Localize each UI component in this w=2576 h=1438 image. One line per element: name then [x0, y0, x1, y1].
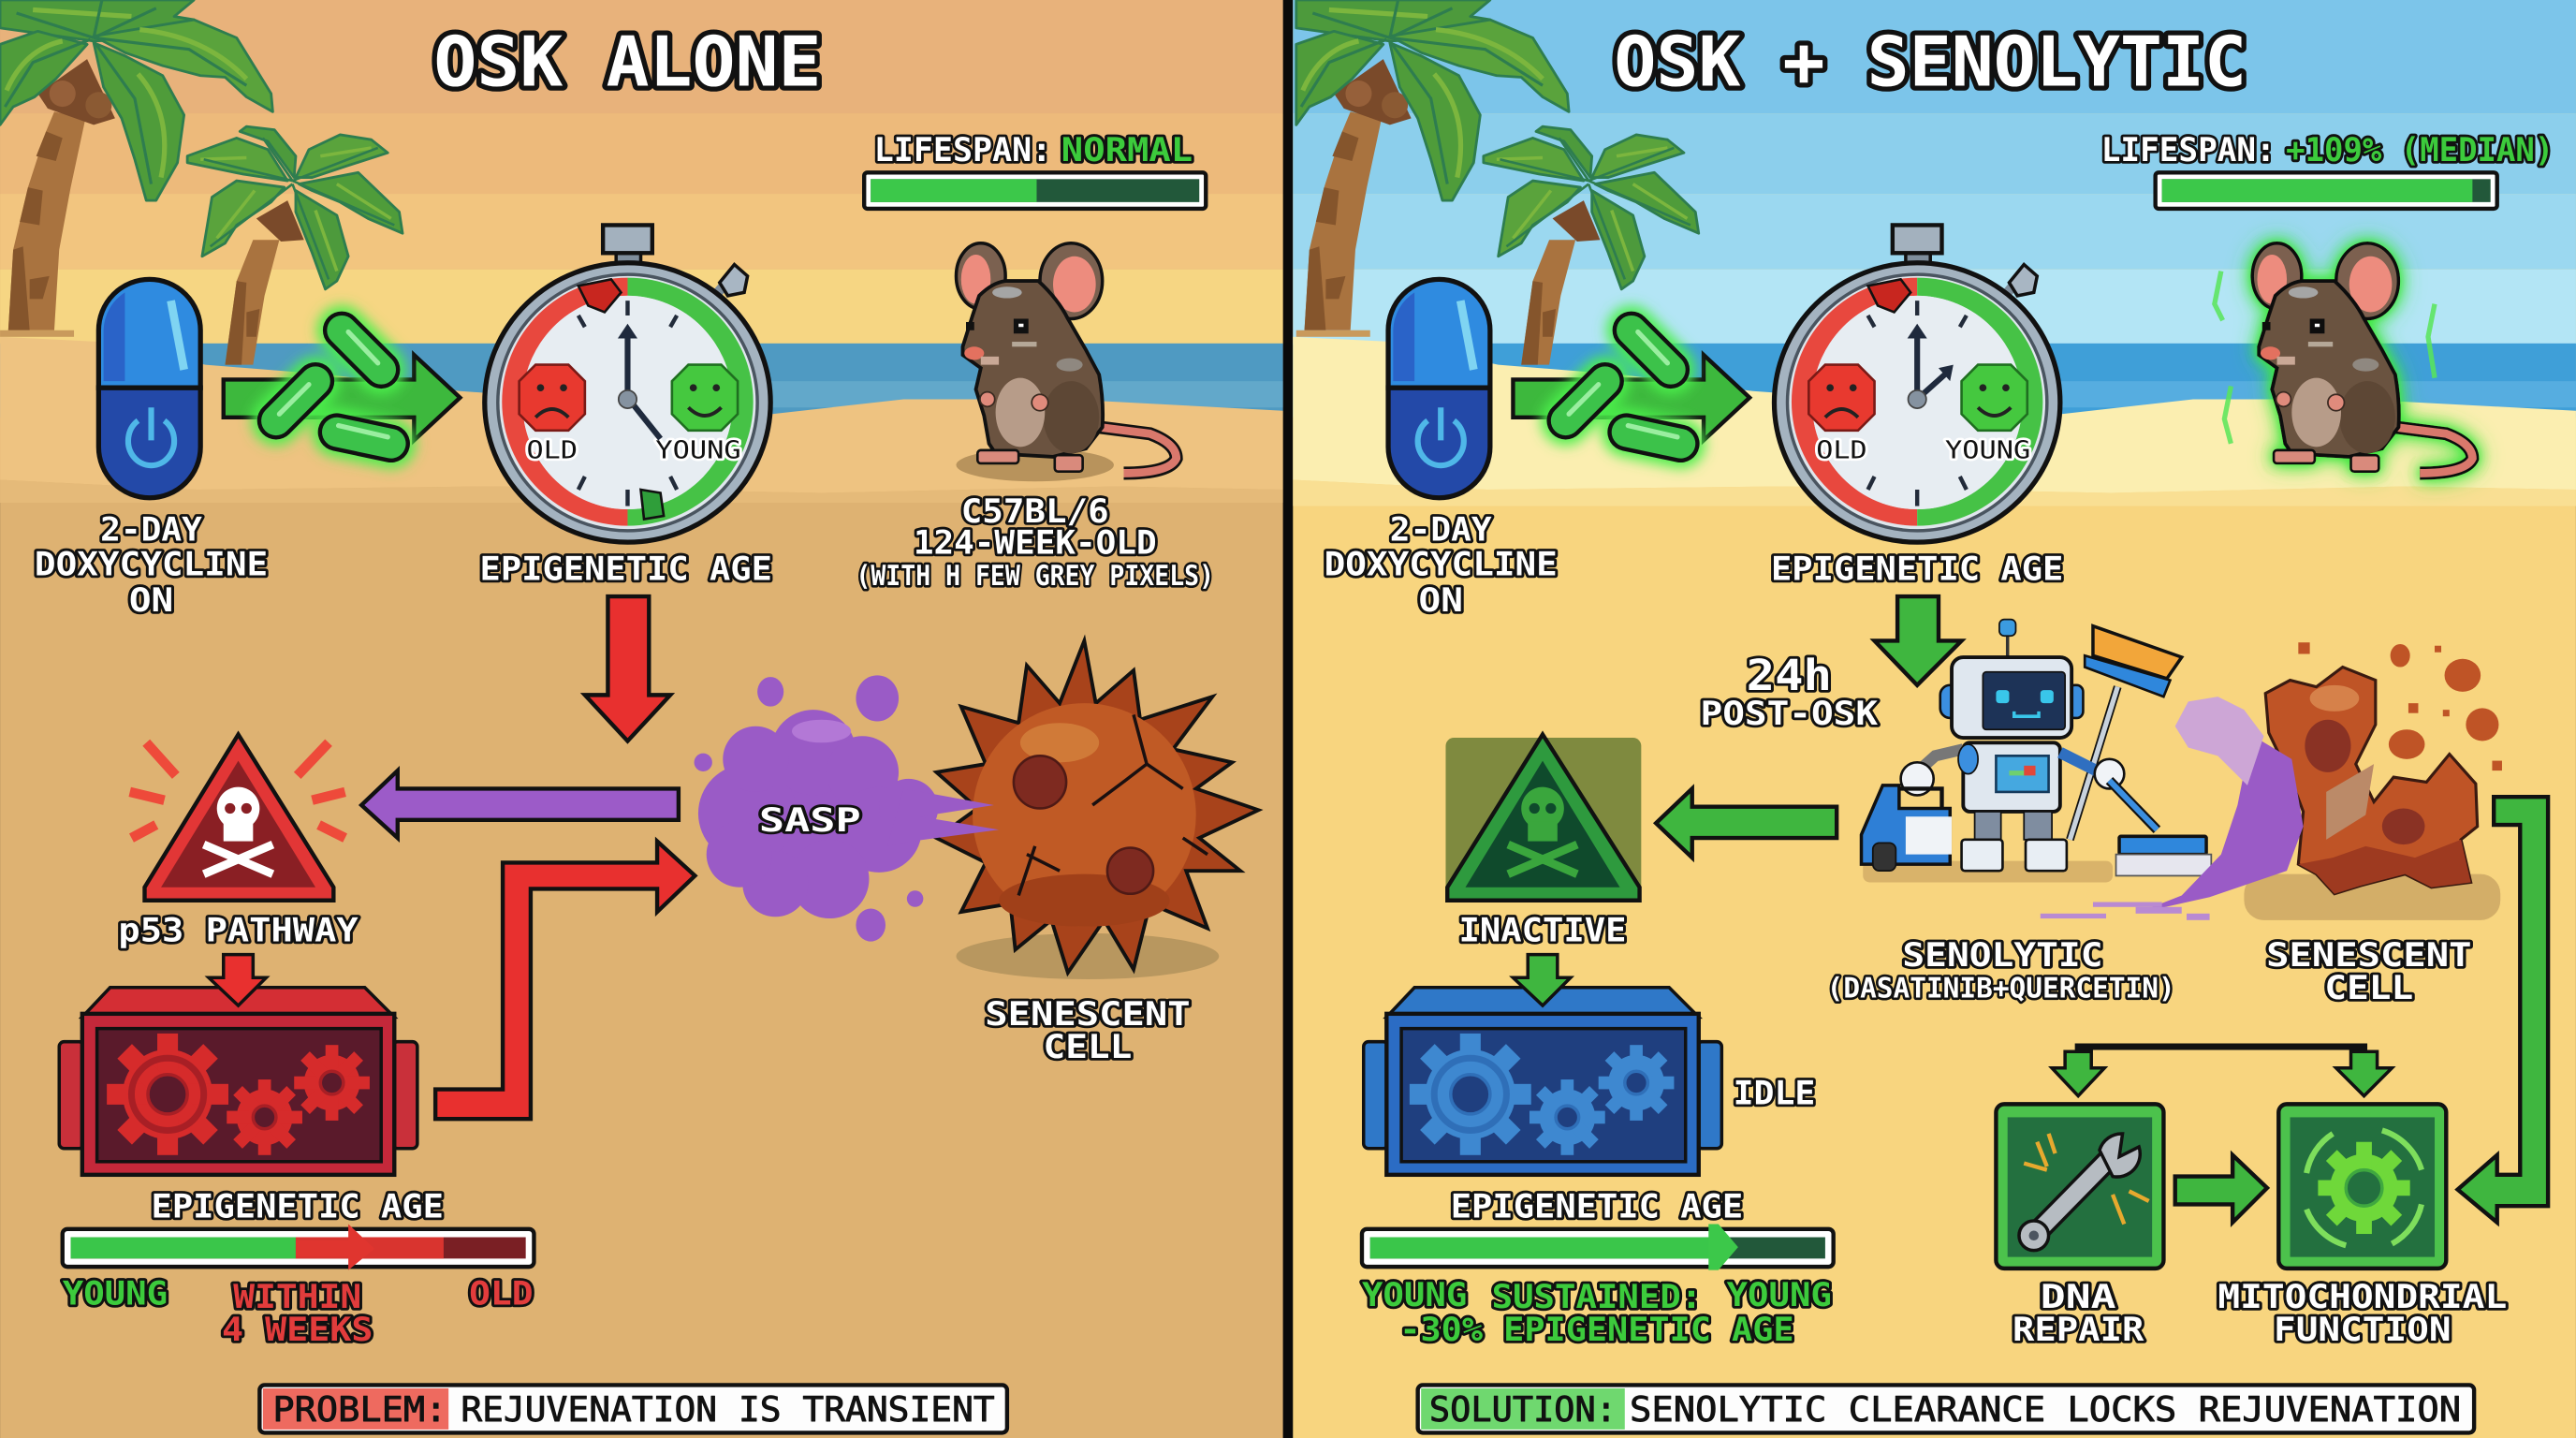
icon: DNA repair wrench — [1996, 1104, 2163, 1269]
label: epigenetic age: EPIGENETIC AGE — [1771, 549, 2063, 588]
bar labels: SUSTAINED: — [1492, 1277, 1702, 1316]
banner: solution — [1418, 1385, 2474, 1432]
bar labels: YOUNG — [1727, 1275, 1832, 1314]
arrow: down to senolytic — [1875, 596, 1962, 685]
label: p53 pathway: p53 PATHWAY — [118, 910, 359, 949]
arrow: SASP to p53 — [361, 770, 679, 838]
icon: mitochondrial function gear — [2278, 1104, 2446, 1269]
label: senolytic: (DASATINIB+QUERCETIN) — [1827, 973, 2175, 1005]
label: epigenetic age bar: EPIGENETIC AGE — [152, 1186, 444, 1225]
icon: stopwatch — [1774, 225, 2060, 542]
title: OSK ALONE — [433, 22, 822, 102]
bar labels: WITHIN — [233, 1277, 361, 1316]
label: idle: IDLE — [1734, 1073, 1815, 1112]
branch arrows to repair and mitochondria — [2052, 1047, 2392, 1096]
label: senescent cell: SENESCENT — [2266, 935, 2471, 975]
label: doxycycline — [35, 509, 268, 620]
label: senescent cell: SENESCENT — [985, 994, 1191, 1034]
icon: aged mouse — [956, 243, 1177, 481]
label: mouse strain — [856, 492, 1214, 594]
icon: rejuvenated glowing mouse — [2215, 243, 2472, 473]
icon: inactive warning triangle — [1445, 734, 1641, 901]
label: mitochondrial function: MITOCHONDRIAL — [2217, 1277, 2507, 1316]
label: DNA repair: DNA — [2041, 1277, 2116, 1316]
title: OSK + SENOLYTIC — [1614, 22, 2247, 102]
label: 24h post-OSK: POST-OSK — [1701, 694, 1878, 733]
arrow: senolytic to inactive p53 — [1656, 788, 1837, 858]
label: senolytic — [1827, 935, 2175, 1005]
arrow: senescent clearance to mitochondria — [2458, 797, 2548, 1223]
arrow: repair to mitochondria — [2175, 1155, 2267, 1223]
label: DNA repair: REPAIR — [2012, 1310, 2145, 1349]
panel: OSK + senolytic — [1293, 0, 2576, 1438]
banner: problem — [259, 1385, 1007, 1432]
lifespan label: LIFESPAN: — [874, 130, 1051, 169]
icon: doxycycline capsule — [98, 279, 200, 498]
label: doxycycline: ON — [129, 580, 173, 620]
banner: problem: PROBLEM: — [272, 1390, 446, 1430]
icon: active red gearbox — [59, 955, 417, 1175]
label: doxycycline: DOXYCYCLINE — [35, 544, 268, 583]
icon: broken senescent cell — [2244, 642, 2502, 920]
label: doxycycline: 2-DAY — [100, 509, 202, 549]
bar labels: YOUNG — [63, 1273, 168, 1313]
label: 24h post-OSK — [1701, 653, 1878, 733]
label: epigenetic age: EPIGENETIC AGE — [480, 549, 772, 588]
icon: idle blue gearbox — [1364, 955, 1721, 1175]
label: doxycycline: DOXYCYCLINE — [1325, 544, 1558, 583]
divider — [1283, 0, 1293, 1438]
label: senescent cell — [985, 994, 1191, 1066]
bar labels — [1362, 1275, 1832, 1349]
palm trees — [0, 0, 402, 365]
label: mouse strain: C57BL/6 — [961, 492, 1109, 531]
label: senescent cell: CELL — [2324, 968, 2413, 1007]
label: DNA repair — [2012, 1277, 2145, 1349]
label: doxycycline: ON — [1419, 580, 1463, 620]
arrow with green pills — [1513, 330, 1749, 444]
label: SASP cloud — [695, 675, 999, 942]
label: senescent cell: CELL — [1044, 1027, 1132, 1066]
label: doxycycline — [1325, 509, 1558, 620]
label: mitochondrial function — [2217, 1277, 2507, 1349]
epigenetic age progress bar — [1362, 1224, 1834, 1270]
lifespan label: NORMAL — [1061, 130, 1193, 169]
label: inactive: INACTIVE — [1459, 910, 1627, 949]
bar labels: OLD — [469, 1273, 534, 1313]
banner: solution: SENOLYTIC CLEARANCE LOCKS REJUVENATION — [1630, 1390, 2461, 1430]
arrow: down to senescence — [585, 596, 670, 741]
icon: p53 warning triangle — [130, 734, 345, 901]
label: senolytic: SENOLYTIC — [1902, 935, 2102, 975]
epigenetic age progress bar — [63, 1224, 534, 1270]
banner: problem: REJUVENATION IS TRANSIENT — [461, 1390, 995, 1430]
label: senescent cell — [2266, 935, 2471, 1007]
label: mouse strain: (WITH H FEW GREY PIXELS) — [856, 560, 1214, 594]
icon: senescent cell — [936, 640, 1258, 979]
label: epigenetic age bar: EPIGENETIC AGE — [1451, 1186, 1743, 1225]
bar labels: YOUNG — [1362, 1275, 1467, 1314]
label: mitochondrial function: FUNCTION — [2274, 1310, 2452, 1349]
icon: cleaning robot — [1862, 620, 2211, 882]
lifespan label: +109% (MEDIAN) — [2286, 130, 2554, 169]
bar labels: 4 WEEKS — [222, 1310, 373, 1349]
label: 24h post-OSK: 24h — [1747, 653, 1832, 701]
lifespan bar — [2156, 172, 2497, 209]
label: SASP cloud: SASP — [759, 800, 861, 840]
icon: stopwatch — [485, 225, 770, 542]
bar labels: -30% EPIGENETIC AGE — [1399, 1310, 1794, 1349]
label: doxycycline: 2-DAY — [1390, 509, 1492, 549]
arrow: gears to SASP — [435, 842, 695, 1119]
icon: doxycycline capsule — [1388, 279, 1490, 498]
arrow with green pills — [224, 330, 460, 444]
panel: OSK alone — [0, 0, 1283, 1438]
lifespan bar — [864, 172, 1206, 209]
lifespan label — [2101, 130, 2554, 169]
palm trees — [1296, 0, 1699, 365]
lifespan label: LIFESPAN: — [2101, 130, 2276, 169]
lifespan label — [874, 130, 1193, 169]
banner: solution: SOLUTION: — [1429, 1390, 1617, 1430]
purple SASP smear — [2041, 697, 2304, 920]
label: mouse strain: 124-WEEK-OLD — [914, 522, 1157, 562]
bar labels — [63, 1273, 534, 1349]
